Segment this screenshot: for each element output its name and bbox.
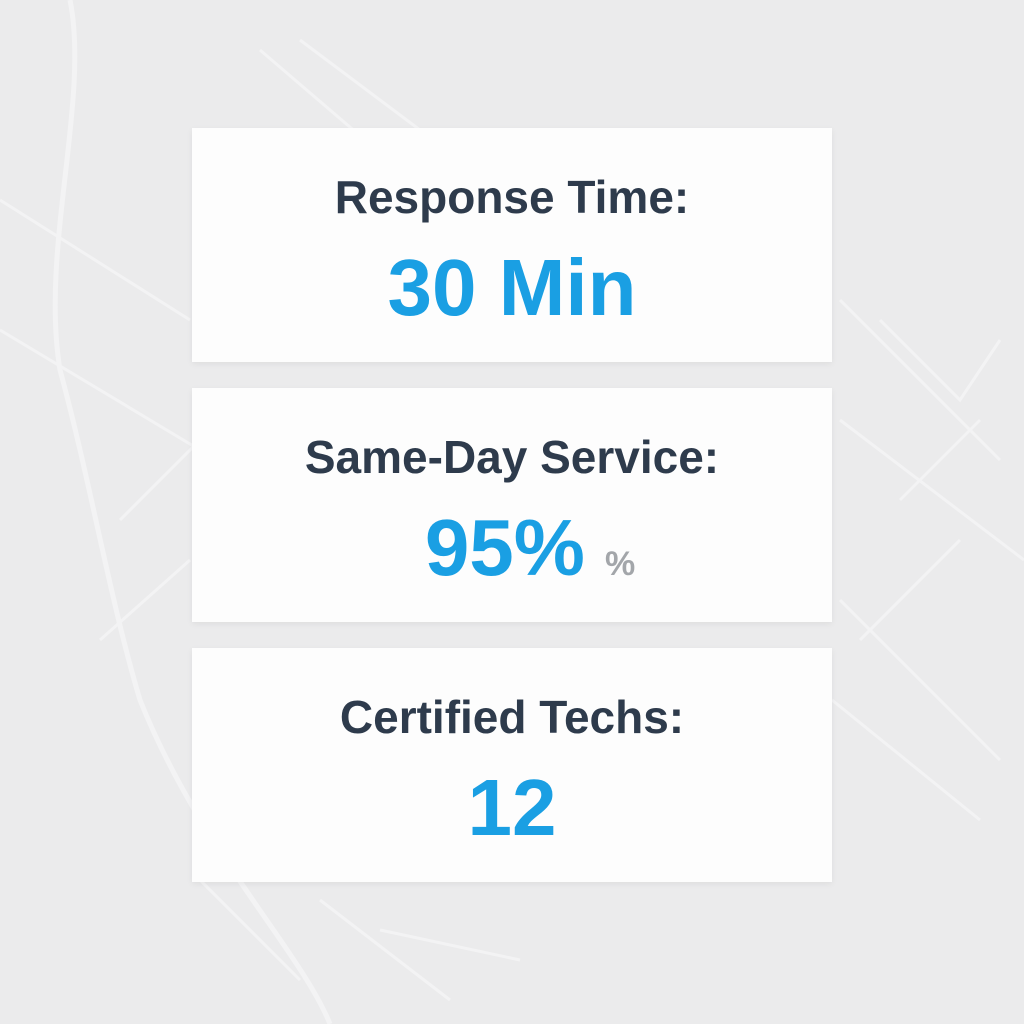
heading: Response Time: xyxy=(335,171,689,223)
value: 95% % xyxy=(425,503,635,592)
card: response time xyxy=(192,128,832,362)
value: 12 xyxy=(468,763,556,852)
heading: Same-Day Service: xyxy=(305,431,719,483)
card: certified techs xyxy=(192,648,832,882)
card: same-day service xyxy=(192,388,832,622)
value: 30 Min xyxy=(388,243,636,332)
heading: Certified Techs: xyxy=(340,691,684,743)
